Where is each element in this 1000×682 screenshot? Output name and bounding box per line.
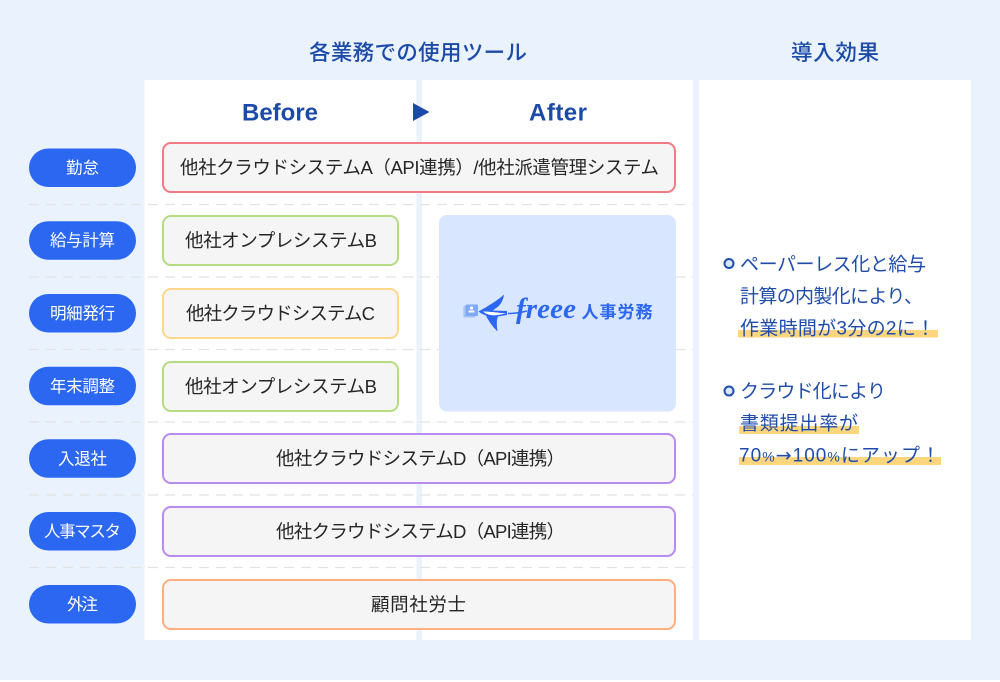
panel: before column xyxy=(144,80,416,640)
pill: hr master: 人事マスタ xyxy=(44,522,121,541)
box: system B payroll: 他社オンプレシステムB xyxy=(185,230,377,251)
effect 2: cloud xyxy=(724,380,941,466)
heading: after: After xyxy=(529,100,587,126)
pill: year-end adjustment xyxy=(29,367,136,405)
box: system D onboarding: 他社クラウドシステムD（API連携） xyxy=(276,448,565,469)
pill: year-end adjustment: 年末調整 xyxy=(50,377,115,396)
box: system D onboarding xyxy=(163,434,675,483)
pill: attendance: 勤怠 xyxy=(66,158,99,178)
effect 2: cloud: クラウド化により xyxy=(740,380,886,402)
highlights xyxy=(739,426,941,465)
pill: pay statements xyxy=(29,294,136,332)
category pills xyxy=(29,148,136,624)
box: labor consultant: 顧問社労士 xyxy=(371,594,466,615)
logo wordmark: freee xyxy=(516,293,576,325)
heading: effects: 導入効果 xyxy=(791,41,879,65)
arrow: before to after xyxy=(413,103,430,121)
pill: pay statements: 明細発行 xyxy=(50,304,115,323)
pill: payroll: 給与計算 xyxy=(50,231,115,250)
effect 1: paperless: ペーパーレス化と給与 xyxy=(740,254,926,276)
icon: id cards xyxy=(463,304,478,318)
icon: swallow xyxy=(478,294,507,332)
panel: freee logo card xyxy=(439,215,676,412)
bullet xyxy=(724,386,734,396)
effect 1: paperless xyxy=(724,254,938,340)
box: system C xyxy=(163,289,398,338)
panel: effects column xyxy=(699,80,971,640)
pill: onboarding: 入退社 xyxy=(58,449,108,468)
logo wordmark: 人事労務 xyxy=(582,303,652,322)
box: system A: 他社クラウドシステムA（API連携）/他社派遣管理システム xyxy=(180,157,659,178)
effect 2: cloud: 70%→100%にアップ！ xyxy=(739,444,940,466)
box: system A xyxy=(163,143,675,192)
effects list xyxy=(724,254,941,466)
pill: payroll xyxy=(29,221,136,260)
bullet xyxy=(724,259,734,268)
box: labor consultant xyxy=(163,580,675,629)
highlight xyxy=(738,330,938,338)
box: system D hr master: 他社クラウドシステムD（API連携） xyxy=(276,521,565,542)
heading: before: Before xyxy=(242,100,318,126)
box: system B payroll xyxy=(163,216,398,265)
pill: attendance xyxy=(29,148,136,187)
pill: onboarding xyxy=(29,439,136,478)
effect 2: cloud: 書類提出率が xyxy=(740,412,858,434)
box: system C: 他社クラウドシステムC xyxy=(186,303,375,324)
effect 1: paperless: 作業時間が3分の2に！ xyxy=(740,318,935,340)
system boxes xyxy=(163,143,675,629)
box: system D hr master xyxy=(163,507,675,556)
pill: outsourcing: 外注 xyxy=(67,595,98,614)
panel: after column xyxy=(422,80,693,640)
pill: hr master xyxy=(29,512,136,550)
pill: outsourcing xyxy=(29,585,136,624)
heading: tools used: 各業務での使用ツール xyxy=(309,41,527,65)
logo wordmark xyxy=(508,293,652,325)
box: system B year-end xyxy=(163,362,398,411)
box: system B year-end: 他社オンプレシステムB xyxy=(185,376,377,397)
effect 1: paperless: 計算の内製化により、 xyxy=(740,286,923,308)
